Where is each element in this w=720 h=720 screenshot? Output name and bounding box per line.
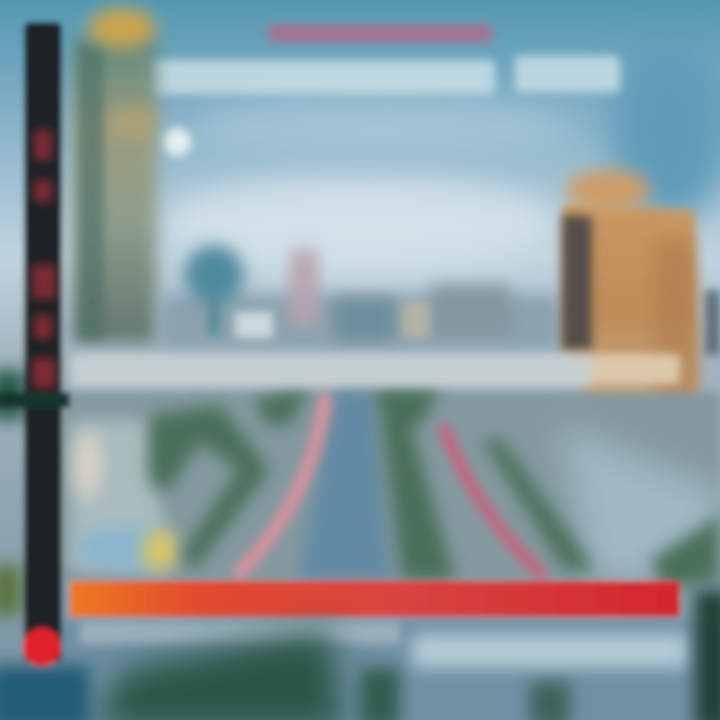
- thermometer: black vertical bar: [23, 22, 62, 666]
- left tower: [72, 8, 157, 343]
- dark crossbar: [0, 392, 70, 408]
- central road: [298, 388, 392, 580]
- right tower: [562, 170, 700, 418]
- lower city ground: [60, 392, 720, 582]
- heading: pink title line: [268, 24, 492, 42]
- icon: white bullet: [163, 128, 191, 156]
- white horizontal band: [72, 354, 680, 386]
- pink road curves: [240, 400, 540, 572]
- midground city skyline: [160, 245, 720, 355]
- left edge greenery: [0, 370, 26, 615]
- bottom foreground: [0, 590, 720, 720]
- red horizontal band: [70, 581, 680, 617]
- heading: white title line: [150, 56, 620, 94]
- thermometer: red bulb: [23, 628, 61, 666]
- green medians and trees: [148, 388, 720, 590]
- thermometer: red segments: [32, 130, 56, 388]
